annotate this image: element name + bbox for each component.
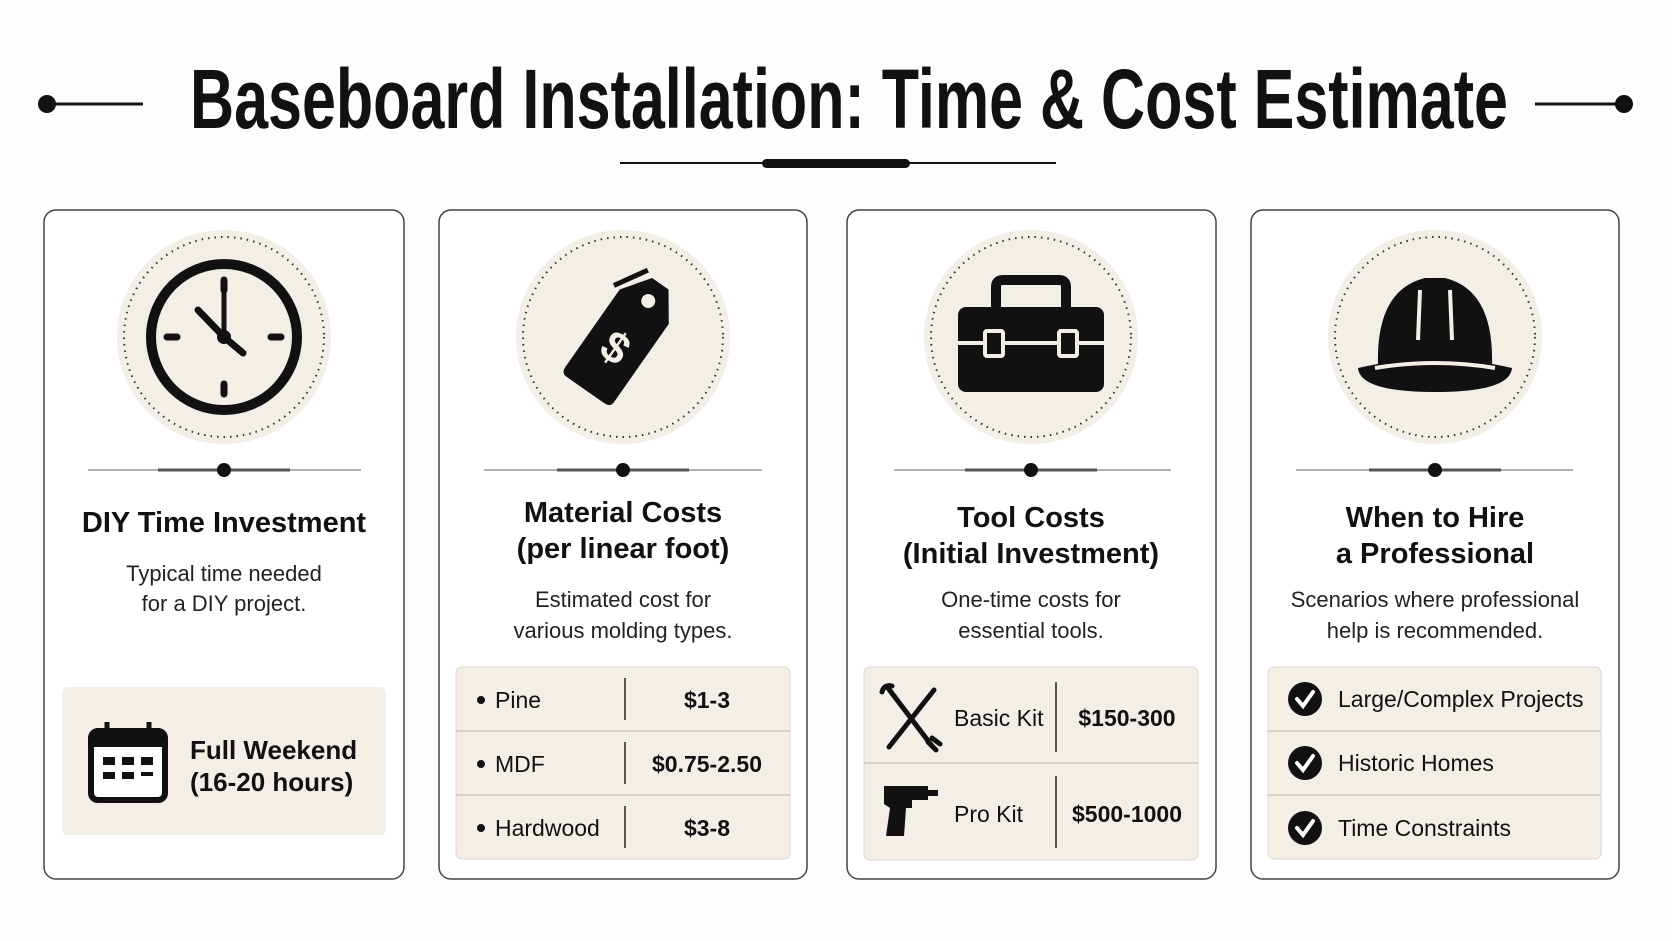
heading: DIY Time Investment — [82, 507, 366, 539]
text block — [514, 587, 732, 643]
table: molding prices: $3-8 — [684, 815, 730, 841]
text block: Typical time needed — [126, 561, 322, 586]
checklist: Time Constraints — [1338, 815, 1511, 841]
text block — [1291, 587, 1579, 643]
table: molding prices: $1-3 — [684, 687, 730, 713]
text block: various molding types. — [514, 618, 732, 643]
text block: One-time costs for — [941, 587, 1121, 612]
heading: Material Costs — [524, 497, 722, 529]
heading — [1336, 502, 1534, 570]
text block — [126, 561, 322, 616]
icon: drill — [884, 786, 938, 836]
table: molding prices: Hardwood — [495, 815, 600, 841]
callout: full weekend: Full Weekend — [190, 735, 357, 765]
table: tool kits: Basic Kit — [954, 705, 1044, 731]
text block: essential tools. — [958, 618, 1104, 643]
text block: Scenarios where professional — [1291, 587, 1579, 612]
table: tool kits: $150-300 — [1078, 705, 1176, 731]
heading: a Professional — [1336, 538, 1534, 570]
text block: help is recommended. — [1327, 618, 1543, 643]
panel: material costs — [439, 210, 807, 879]
heading — [517, 497, 729, 565]
callout: full weekend: (16-20 hours) — [190, 767, 353, 797]
table: tool kits — [864, 667, 1198, 860]
panel: tool costs — [847, 210, 1216, 879]
heading: (Initial Investment) — [903, 538, 1159, 570]
panel: when to hire — [1251, 210, 1619, 879]
icon: wrench and screwdriver — [882, 686, 940, 750]
checklist: Large/Complex Projects — [1338, 686, 1583, 712]
checklist: Historic Homes — [1338, 750, 1494, 776]
heading: (per linear foot) — [517, 533, 729, 565]
icon: clock — [117, 230, 331, 444]
text block: for a DIY project. — [142, 591, 306, 616]
text block — [941, 587, 1121, 643]
heading: When to Hire — [1346, 502, 1524, 534]
table: molding prices: $0.75-2.50 — [652, 751, 762, 777]
table: molding prices: MDF — [495, 751, 545, 777]
callout: full weekend — [62, 687, 386, 835]
heading — [903, 502, 1159, 570]
icon: hard hat — [1328, 230, 1542, 444]
table: tool kits: Pro Kit — [954, 801, 1024, 827]
icon: price tag: $ — [591, 321, 639, 375]
table: molding prices — [456, 667, 790, 859]
text block: Estimated cost for — [535, 587, 711, 612]
checklist — [1268, 667, 1601, 859]
icon: calendar — [91, 722, 165, 800]
icon: toolbox — [924, 230, 1138, 444]
table: molding prices: Pine — [495, 687, 541, 713]
panel: DIY time — [44, 210, 404, 879]
icon: price tag — [516, 230, 730, 444]
table: tool kits: $500-1000 — [1072, 801, 1182, 827]
heading: Tool Costs — [957, 502, 1105, 534]
